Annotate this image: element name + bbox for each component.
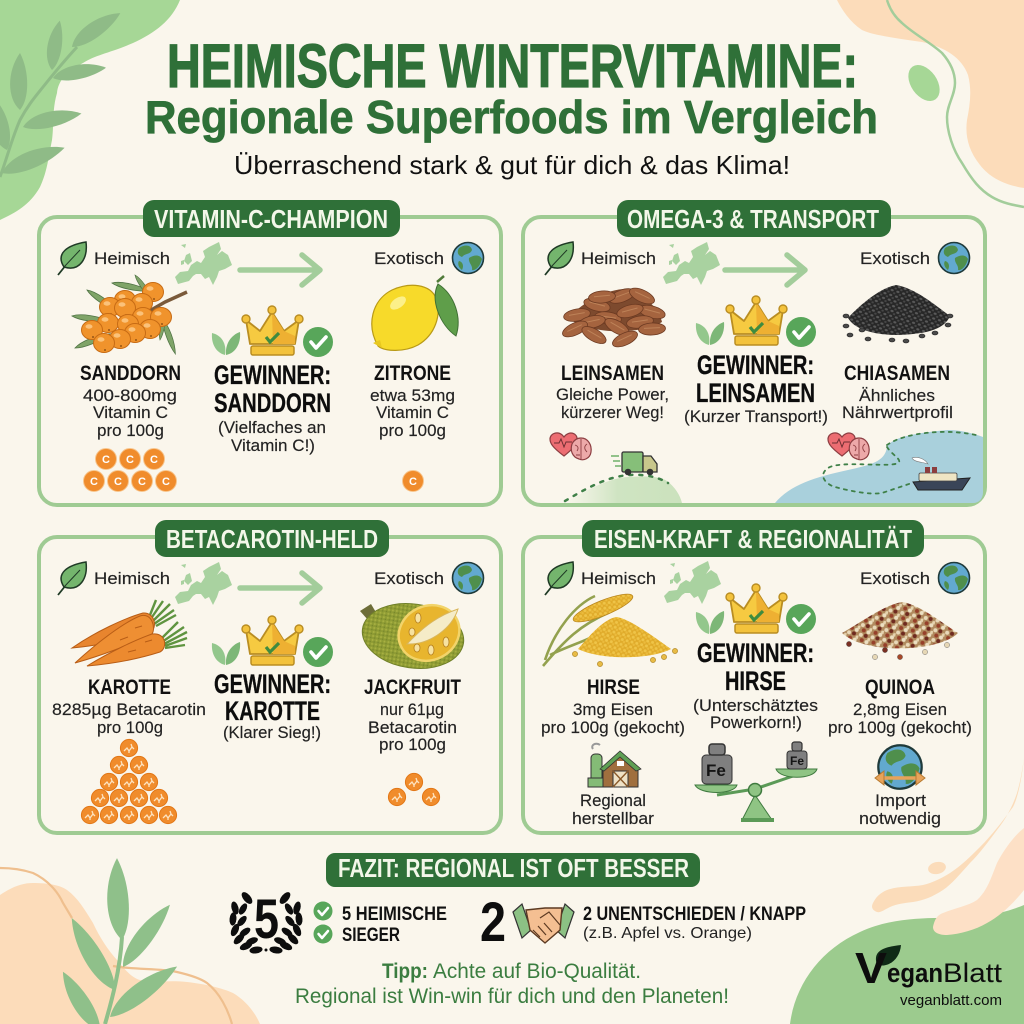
header row: Heimisch to Exotisch: Exotisch	[860, 250, 930, 268]
header row: Heimisch to Exotisch: Heimisch	[94, 250, 170, 268]
header row: Heimisch to Exotisch: Exotisch	[374, 570, 444, 588]
winner text	[684, 350, 828, 426]
icon: millet	[543, 589, 678, 667]
vitamin C coins: Sanddorn: C	[90, 476, 98, 488]
betacarotene coins: Karotte	[81, 739, 177, 824]
draws summary: (z.B. Apfel vs. Orange)	[583, 925, 752, 942]
text: Chiasamen	[842, 362, 953, 422]
title	[145, 32, 878, 143]
text: Chiasamen: Nährwertprofil	[842, 404, 953, 422]
corner shape: top-left green with branch	[0, 0, 180, 220]
text: Zitrone: etwa 53mg	[370, 387, 455, 405]
icon: laurel wreath with 5	[229, 887, 303, 954]
text: Karotte: KAROTTE	[88, 676, 171, 699]
icon: heart and brain	[550, 433, 591, 460]
vitamin C coin: Zitrone: C	[409, 476, 417, 488]
corner shape: top-right peach	[837, 0, 1024, 207]
header row: Heimisch and Exotisch: Heimisch	[581, 570, 656, 588]
draws summary: 2 UNENTSCHIEDEN / KNAPP	[583, 904, 806, 925]
icon: winner crown	[696, 584, 816, 634]
winner text: (Vielfaches an	[218, 419, 326, 437]
corner shape: bottom-left peach with plant	[0, 858, 260, 1024]
winner text: KAROTTE	[225, 696, 320, 726]
header row: Heimisch to Exotisch	[58, 242, 484, 285]
text: Zitrone: pro 100g	[379, 422, 446, 440]
panel: Vitamin-C-Champion	[39, 200, 501, 505]
icon: laurel wreath with 5: 5	[254, 887, 279, 950]
text: Jackfruit: nur 61µg	[380, 701, 444, 719]
text: Sanddorn: Vitamin C	[93, 404, 168, 422]
icon: ship	[912, 457, 970, 490]
header row: Heimisch to Exotisch: Heimisch	[94, 570, 170, 588]
vitamin C coins: Sanddorn: C	[102, 454, 110, 466]
text: Sanddorn: 400-800mg	[83, 387, 177, 405]
vitamin C coins: Sanddorn: C	[126, 454, 134, 466]
icon: balance scale with iron weights	[695, 742, 817, 822]
winner text	[214, 669, 331, 742]
vitamin C coins: Sanddorn: C	[162, 476, 170, 488]
text: Hirse: 3mg Eisen	[573, 701, 653, 719]
text: Jackfruit: pro 100g	[379, 736, 446, 754]
icon: flax seeds	[560, 285, 667, 350]
text: Zitrone: Vitamin C	[376, 404, 449, 422]
text: Hirse: pro 100g (gekocht)	[541, 719, 685, 737]
logo: VeganBlatt: egan	[887, 958, 943, 988]
panel heading pill: OMEGA-3 & TRANSPORT	[627, 204, 879, 234]
logo: VeganBlatt: V	[855, 944, 888, 993]
text: Import notwendig	[859, 792, 941, 828]
icon: balance scale with iron weights: Fe	[706, 761, 726, 780]
winners list: SIEGER	[342, 925, 400, 946]
header row: Heimisch and Exotisch: Exotisch	[860, 570, 930, 588]
icon: winner crown	[212, 306, 333, 357]
winner text: SANDDORN	[214, 388, 331, 418]
icon: quinoa pile	[842, 602, 958, 660]
panel: Omega-3 & Transport	[523, 200, 985, 505]
draws summary	[583, 904, 806, 942]
panel heading pill	[582, 520, 924, 557]
panel heading pill	[155, 520, 389, 557]
text: Import notwendig: Import	[875, 792, 926, 810]
logo: VeganBlatt: veganblatt.com	[900, 992, 1002, 1009]
tip	[295, 960, 729, 1008]
winner text: LEINSAMEN	[696, 378, 815, 408]
header row: Heimisch to Exotisch	[545, 242, 970, 285]
winner text: GEWINNER:	[697, 638, 814, 668]
icon: lemon	[372, 276, 458, 350]
text: Import notwendig: notwendig	[859, 810, 941, 828]
conclusion heading pill: FAZIT: REGIONAL IST OFT BESSER	[338, 853, 689, 883]
header row: Heimisch to Exotisch: Exotisch	[374, 250, 444, 268]
text: Karotte: pro 100g	[97, 719, 163, 737]
icon: heart and brain	[828, 433, 869, 460]
text: Hirse: HIRSE	[587, 676, 640, 699]
winner text	[693, 638, 818, 732]
panel heading pill: BETACAROTIN-HELD	[166, 524, 378, 554]
text: Quinoa: 2,8mg Eisen	[853, 701, 947, 719]
text: Hirse	[541, 676, 685, 737]
icon: handshake	[513, 904, 574, 943]
winner text: Vitamin C!)	[231, 437, 315, 455]
subtitle: Überraschend stark & gut für dich & das Klima!	[234, 150, 790, 180]
title: Regionale Superfoods im Vergleich	[145, 91, 878, 143]
header row: Heimisch to Exotisch	[58, 562, 484, 605]
tip: Tipp:	[382, 960, 428, 983]
text: Chiasamen: CHIASAMEN	[844, 362, 950, 385]
logo: VeganBlatt: Blatt	[943, 958, 1003, 988]
icon: sea buckthorn	[72, 274, 187, 355]
icon: winner crown	[696, 296, 816, 347]
text: Leinsamen	[556, 362, 669, 422]
text: Jackfruit: Betacarotin	[368, 719, 457, 737]
text: Sanddorn: pro 100g	[97, 422, 164, 440]
winner text: Powerkorn!)	[710, 714, 802, 732]
text: Regional herstellbar: Regional	[580, 792, 646, 810]
text: Quinoa	[828, 676, 972, 737]
vitamin C coin: Zitrone	[402, 470, 424, 492]
text: Sanddorn: SANDDORN	[80, 362, 181, 385]
vitamin C coins: Sanddorn	[84, 448, 176, 492]
text: Leinsamen: Gleiche Power,	[556, 386, 669, 404]
text: Sanddorn	[80, 362, 181, 440]
text: Regional herstellbar	[572, 792, 655, 828]
winner text: (Unterschätztes	[693, 697, 818, 715]
panel heading pill: VITAMIN-C-CHAMPION	[154, 204, 388, 234]
vitamin C coins: Sanddorn: C	[150, 454, 158, 466]
tip: Regional ist Win-win für dich und den Planeten!	[295, 985, 729, 1008]
panel: Betacarotin-Held	[39, 520, 501, 833]
winner text: GEWINNER:	[214, 669, 331, 699]
text: Karotte	[52, 676, 206, 737]
panel: Eisen-Kraft & Regionalität	[523, 520, 985, 833]
winner text: (Kurzer Transport!)	[684, 408, 828, 426]
text: Leinsamen: kürzerer Weg!	[561, 404, 664, 422]
winners list	[314, 902, 447, 946]
text: Quinoa: pro 100g (gekocht)	[828, 719, 972, 737]
logo: VeganBlatt	[855, 944, 1003, 1009]
vitamin C coins: Sanddorn: C	[138, 476, 146, 488]
text: Zitrone: ZITRONE	[374, 362, 451, 385]
text: Quinoa: QUINOA	[865, 676, 935, 699]
winners list: 5 HEIMISCHE	[342, 904, 447, 925]
text: Jackfruit: JACKFRUIT	[364, 676, 461, 699]
text: Chiasamen: Ähnliches	[859, 387, 935, 405]
icon: winner crown	[212, 616, 333, 667]
icon: globe with import arrows	[875, 745, 925, 789]
panel heading pill: EISEN-KRAFT & REGIONALITÄT	[594, 524, 912, 554]
big number 2: 2	[480, 890, 506, 953]
text: Leinsamen: LEINSAMEN	[561, 362, 664, 385]
winner text: (Klarer Sieg!)	[223, 724, 321, 742]
tip: Achte auf Bio-Qualität.	[433, 960, 641, 983]
panel heading pill	[617, 200, 891, 237]
betacarotene coins: Jackfruit	[388, 773, 440, 806]
icon: truck	[611, 452, 657, 475]
text: Jackfruit	[364, 676, 461, 754]
header row: Heimisch and Exotisch	[545, 561, 970, 604]
winner text: GEWINNER:	[214, 360, 331, 390]
illustration: land and sea route	[565, 430, 983, 503]
text: Karotte: 8285µg Betacarotin	[52, 701, 206, 719]
vitamin C coins: Sanddorn: C	[114, 476, 122, 488]
winner text: HIRSE	[725, 666, 786, 696]
icon: chia seeds	[843, 285, 953, 343]
text: Regional herstellbar: herstellbar	[572, 810, 655, 828]
header row: Heimisch to Exotisch: Heimisch	[581, 250, 656, 268]
panel heading pill	[143, 200, 400, 237]
winner text: GEWINNER:	[697, 350, 814, 380]
icon: carrots	[72, 600, 187, 666]
winner text	[214, 360, 331, 455]
text: Zitrone	[370, 362, 455, 440]
corner shape: bottom-right green and peach	[790, 758, 1024, 1024]
icon: farm barn	[588, 744, 641, 787]
icon: balance scale with iron weights: Fe	[790, 754, 804, 768]
icon: jackfruit	[358, 595, 469, 675]
